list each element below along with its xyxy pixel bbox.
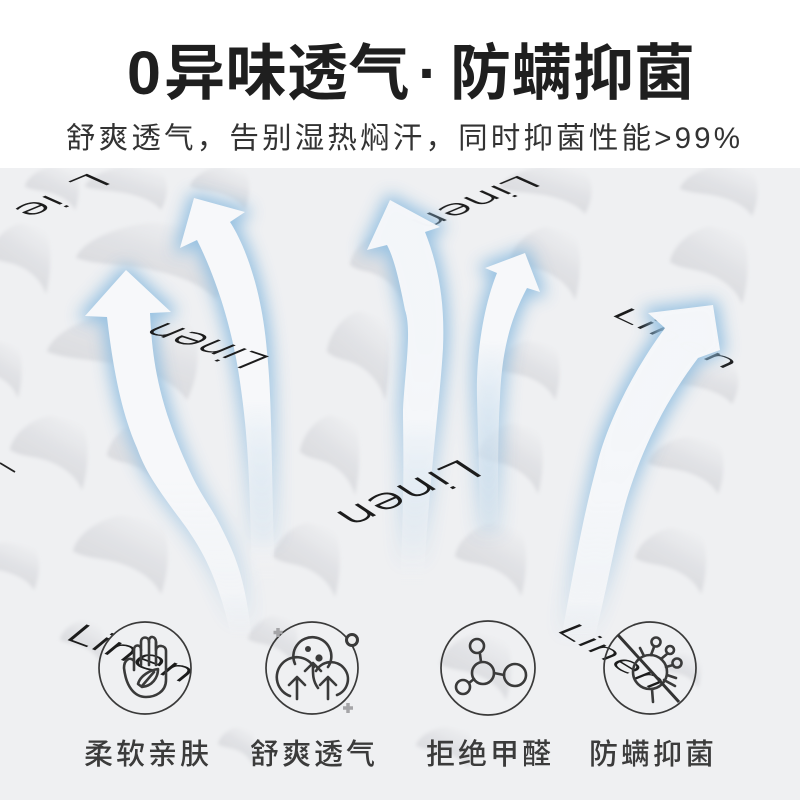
Linen print: bottom left: Linen <box>57 619 208 688</box>
quilted wave shadows <box>0 166 757 768</box>
arrow 2: left back <box>180 198 273 534</box>
Linen print: top centre: Linen <box>400 171 549 234</box>
Linen print: centre: Linen <box>325 453 492 534</box>
label: anti-mite antibacterial: 防螨抑菌 <box>589 738 714 771</box>
Linen print: top left fragment: ie <box>4 191 78 223</box>
Linen print: mid left: Linen <box>128 318 282 373</box>
arrow glow: blue halos <box>85 198 720 640</box>
icon: anti-mite <box>604 622 696 714</box>
Linen print: bottom right: Linen <box>548 620 679 692</box>
Linen print: left edge fragment <box>0 463 15 472</box>
subtitle: 舒爽透气，告别湿热焖汗，同时抑菌性能>99% <box>66 122 740 155</box>
label: breathable: 舒爽透气 <box>250 738 375 771</box>
icon: formaldehyde molecule <box>441 621 535 715</box>
icon: soft hand <box>99 622 191 714</box>
title: 0异味透气·防螨抑菌 <box>127 39 695 107</box>
mattress fabric base <box>0 168 800 800</box>
arrow 3: centre large <box>367 200 444 536</box>
arrow 4: centre small <box>476 253 540 494</box>
label: soft on skin: 柔软亲肤 <box>84 738 209 771</box>
arrow 5: right large <box>560 305 720 645</box>
arrow 1: left large <box>85 270 252 640</box>
Linen print: top left L: L <box>60 169 120 195</box>
panel: mattress photo <box>0 166 800 800</box>
label: formaldehyde free: 拒绝甲醛 <box>426 738 551 771</box>
Linen print: right, under arrow: Linen <box>603 304 749 373</box>
icon: breathable cloud <box>266 622 358 714</box>
